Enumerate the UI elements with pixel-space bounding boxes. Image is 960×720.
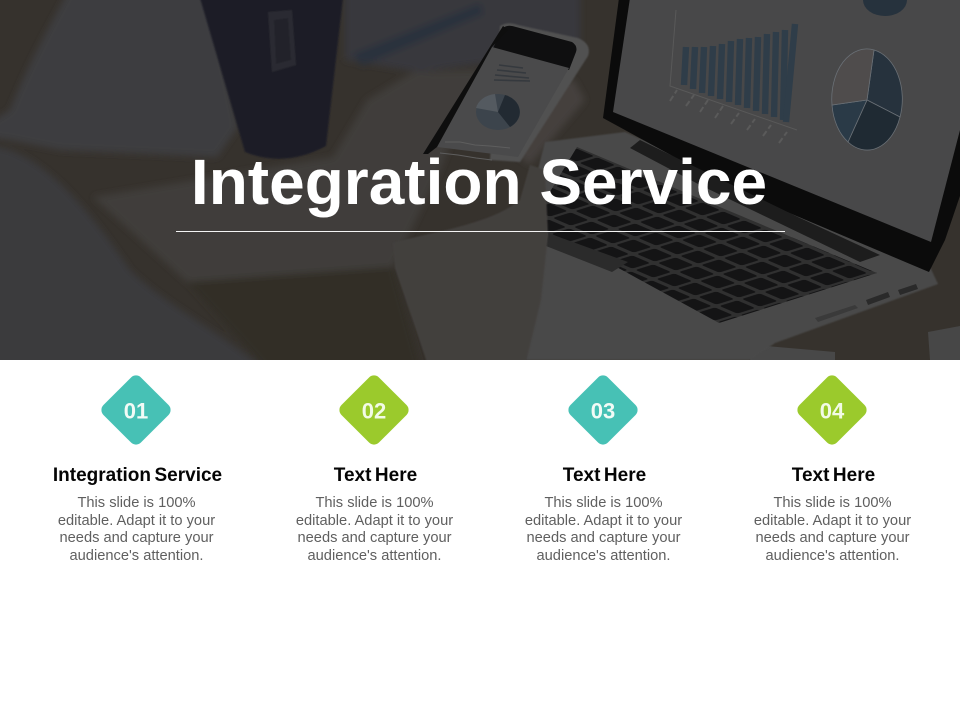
icon: green diamond 04: 04: [820, 398, 845, 424]
description: [296, 495, 453, 564]
laptop screen: [613, 0, 960, 242]
icon: green diamond 02: 02: [362, 398, 386, 424]
paper on desk, bottom right: [750, 345, 835, 360]
pie chart on screen: [832, 49, 902, 150]
description: editable. Adapt it to your: [754, 513, 911, 529]
laptop: [520, 0, 960, 360]
card 4: [754, 375, 911, 564]
heading: Text Here: [563, 465, 646, 486]
description: editable. Adapt it to your: [525, 513, 682, 529]
description: audience's attention.: [70, 548, 204, 564]
description: This slide is 100%: [77, 495, 196, 511]
description: audience's attention.: [536, 548, 670, 564]
heading: Integration Service: [53, 465, 222, 486]
background photo: laptop and phone on a desk, darkened: [0, 0, 960, 360]
phone screen content: [494, 65, 530, 81]
icon: green diamond 04: [797, 375, 867, 445]
description: This slide is 100%: [773, 495, 892, 511]
small pie at top of screen: [863, 0, 907, 16]
title underline: [176, 231, 785, 232]
card 3: [525, 375, 682, 564]
description: [525, 495, 682, 564]
description: needs and capture your: [298, 530, 452, 546]
description: editable. Adapt it to your: [58, 513, 215, 529]
description: [58, 495, 215, 564]
smartphone: [423, 23, 589, 162]
heading: Text Here: [792, 465, 875, 486]
coffee mug: [200, 0, 343, 159]
description: needs and capture your: [756, 530, 910, 546]
icon: green diamond 02: [339, 375, 409, 445]
icon: teal diamond 03: 03: [591, 398, 615, 424]
description: [754, 495, 911, 564]
laptop base: [520, 132, 938, 360]
bar chart on screen: [684, 24, 795, 122]
description: needs and capture your: [60, 530, 214, 546]
icon: teal diamond 01: 01: [124, 398, 148, 424]
chart axes: [670, 10, 797, 130]
card 2: [296, 375, 453, 564]
description: needs and capture your: [526, 530, 680, 546]
description: This slide is 100%: [315, 495, 434, 511]
blurred desk objects: [0, 0, 585, 390]
title: Integration Service: [191, 146, 767, 218]
icon: teal diamond 03: [568, 375, 638, 445]
description: This slide is 100%: [544, 495, 663, 511]
description: audience's attention.: [308, 548, 442, 564]
card 1: [53, 375, 222, 564]
icon: teal diamond 01: [101, 375, 171, 445]
description: audience's attention.: [766, 548, 900, 564]
front hand: [393, 165, 548, 362]
heading: Text Here: [334, 465, 417, 486]
description: editable. Adapt it to your: [296, 513, 453, 529]
laptop lid bezel: [603, 0, 960, 272]
